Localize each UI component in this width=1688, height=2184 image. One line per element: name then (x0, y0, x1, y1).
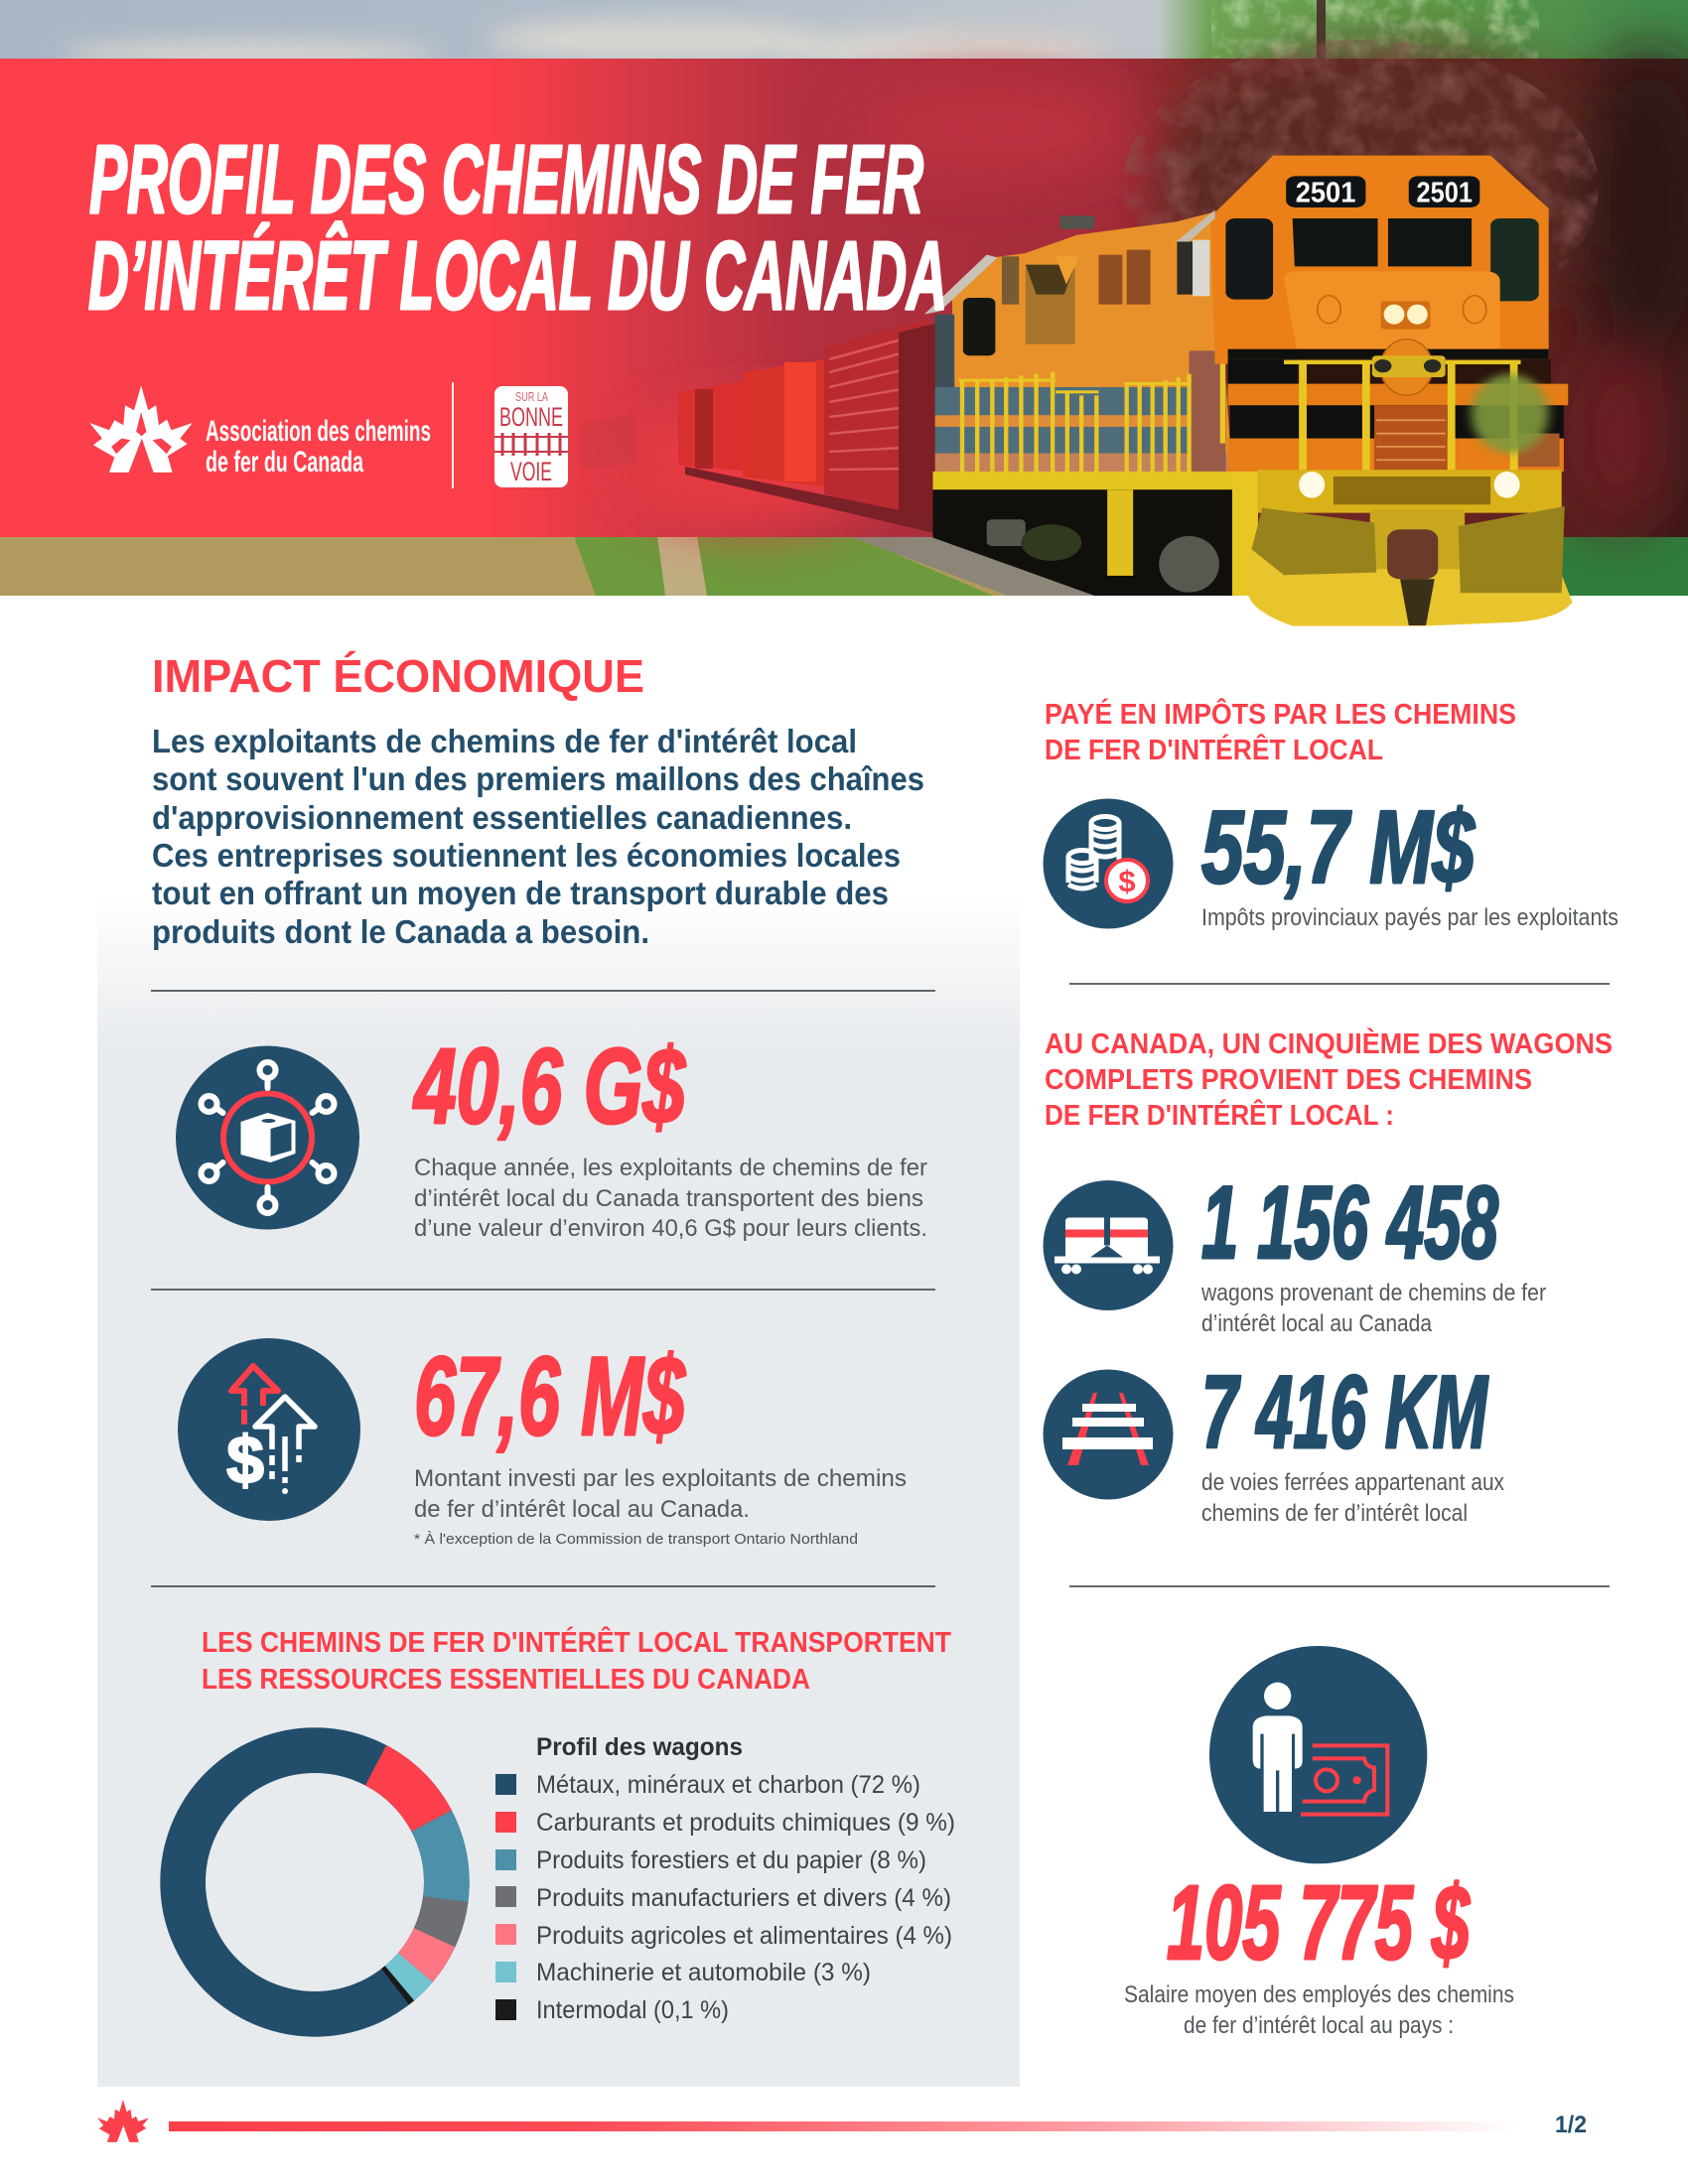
rear locomotive (924, 211, 1258, 596)
legend: car profile: Produits manufacturiers et divers (4 %) (536, 1884, 951, 1912)
description (1124, 1981, 1514, 2039)
description: Montant investi par les exploitants de chemins (414, 1465, 907, 1492)
icon: footer maple leaf (97, 2100, 149, 2142)
description: Salaire moyen des employés des chemins (1124, 1981, 1514, 2008)
description: wagons provenant de chemins de fer (1200, 1280, 1546, 1306)
logo: sur la bonne voie: BONNE (499, 402, 563, 432)
stat block: investment (178, 1334, 907, 1548)
number: 67,6 M$: 67,6 M$ (414, 1334, 686, 1458)
stat block: average salary (1124, 1646, 1514, 2039)
intro paragraph: tout en offrant un moyen de transport durable des (152, 875, 889, 911)
heading: taxes: PAYÉ EN IMPÔTS PAR LES CHEMINS (1045, 697, 1516, 731)
number: 40,6 G$: 40,6 G$ (413, 1025, 686, 1146)
description: de fer d’intérêt local au pays : (1184, 2012, 1454, 2039)
logo: sur la bonne voie: SUR LA (515, 389, 548, 404)
description: d’intérêt local au Canada (1201, 1310, 1432, 1337)
snow plow and lights (1247, 470, 1573, 626)
logo: sur la bonne voie (494, 386, 568, 487)
header banner (0, 0, 1688, 626)
freight cars (581, 320, 938, 534)
description: de fer d’intérêt local au Canada. (414, 1496, 750, 1523)
description: Chaque année, les exploitants de chemins de fer (414, 1155, 927, 1181)
icon: coins (1043, 798, 1174, 929)
heading: impact economique: IMPACT ÉCONOMIQUE (152, 650, 644, 702)
legend: car profile: Métaux, minéraux et charbon (72 %) (536, 1771, 920, 1799)
icon: rising arrows and dollar (178, 1338, 360, 1521)
heading: one fifth of carloads: DE FER D'INTÉRÊT LOCAL : (1045, 1098, 1394, 1132)
description: chemins de fer d’intérêt local (1201, 1500, 1468, 1527)
title (88, 125, 947, 330)
icon: coins: $ (1118, 864, 1136, 898)
icon: package network (176, 1046, 359, 1229)
description: Impôts provinciaux payés par les exploitants (1201, 904, 1618, 931)
donut chart: car profile (183, 1750, 447, 2014)
sky photo strip (0, 0, 1688, 69)
stat block: goods value (176, 1025, 927, 1242)
front cab (1177, 156, 1568, 472)
intro paragraph (152, 723, 924, 950)
number board right: 2501 (1417, 176, 1473, 207)
icon: railway track (1043, 1370, 1174, 1499)
number: 105 775 $: 105 775 $ (1167, 1864, 1471, 1981)
icon: rail car (1043, 1180, 1174, 1310)
logo: sur la bonne voie: VOIE (510, 457, 552, 486)
legend: car profile: Machinerie et automobile (3 %) (536, 1959, 871, 1986)
legend: car profile: Intermodal (0,1 %) (536, 1996, 729, 2024)
heading: essential resources (202, 1625, 951, 1696)
number: 55,7 M$: 55,7 M$ (1201, 790, 1476, 905)
footer (97, 2100, 1587, 2142)
red banner band (0, 40, 1688, 537)
icon: employee and banknote (1209, 1646, 1427, 1863)
legend: car profile (495, 1733, 955, 2024)
stat block: track kilometres (1043, 1355, 1504, 1527)
intro paragraph: produits dont le Canada a besoin. (152, 913, 649, 950)
legend: car profile: Produits forestiers et du papier (8 %) (536, 1846, 926, 1874)
number: 1 156 458: 1 156 458 (1201, 1165, 1498, 1281)
stat block: wagons (1043, 1165, 1546, 1337)
stat block: taxes (1043, 790, 1618, 931)
description (414, 1465, 907, 1523)
heading: one fifth of carloads: AU CANADA, UN CINQUIÈME DES WAGONS (1045, 1026, 1613, 1060)
legend: car profile: Produits agricoles et alimentaires (4 %) (536, 1922, 952, 1950)
legend: car profile: Profil des wagons (536, 1733, 743, 1761)
association name: Association des chemins (206, 415, 431, 448)
title: PROFIL DES CHEMINS DE FER (89, 125, 923, 233)
locomotive (924, 156, 1573, 626)
description: d’une valeur d’environ 40,6 G$ pour leurs clients. (414, 1215, 927, 1242)
intro paragraph: d'approvisionnement essentielles canadiennes. (152, 799, 852, 836)
heading: taxes: DE FER D'INTÉRÊT LOCAL (1045, 733, 1383, 766)
legend: car profile: Carburants et produits chimiques (9 %) (536, 1809, 955, 1837)
icon: rising arrows and dollar: $ (226, 1423, 264, 1498)
description: d’intérêt local du Canada transportent des biens (414, 1185, 923, 1212)
intro paragraph: Ces entreprises soutiennent les économies locales (152, 837, 901, 874)
number: 7 416 km: 7 416 KM (1201, 1355, 1489, 1470)
number board left: 2501 (1296, 176, 1355, 207)
intro paragraph: Les exploitants de chemins de fer d'intérêt local (152, 723, 857, 759)
description (1200, 1280, 1546, 1337)
footnote: * À l'exception de la Commission de transport Ontario Northland (414, 1531, 858, 1548)
description (1201, 1469, 1504, 1527)
page number: 1/2 (1555, 2112, 1587, 2138)
heading: essential resources: LES RESSOURCES ESSENTIELLES DU CANADA (202, 1664, 810, 1696)
logo: railway association: de fer du Canada (206, 446, 363, 478)
heading: one fifth of carloads: COMPLETS PROVIENT DES CHEMINS (1045, 1064, 1532, 1096)
heading: one fifth of carloads (1045, 1026, 1613, 1132)
panel: grey economic impact background (97, 893, 1020, 2087)
logo: railway association (89, 385, 431, 478)
intro paragraph: sont souvent l'un des premiers maillons des chaînes (152, 760, 924, 797)
footer gradient bar (169, 2121, 1519, 2131)
heading: taxes (1045, 697, 1516, 766)
heading: essential resources: LES CHEMINS DE FER D'INTÉRÊT LOCAL TRANSPORTENT (202, 1625, 951, 1659)
icon: maple leaf (89, 385, 193, 473)
title: D’INTÉRÊT LOCAL DU CANADA (88, 221, 947, 330)
field photo strip (0, 536, 1688, 596)
description (414, 1155, 927, 1242)
description: de voies ferrées appartenant aux (1201, 1469, 1504, 1496)
